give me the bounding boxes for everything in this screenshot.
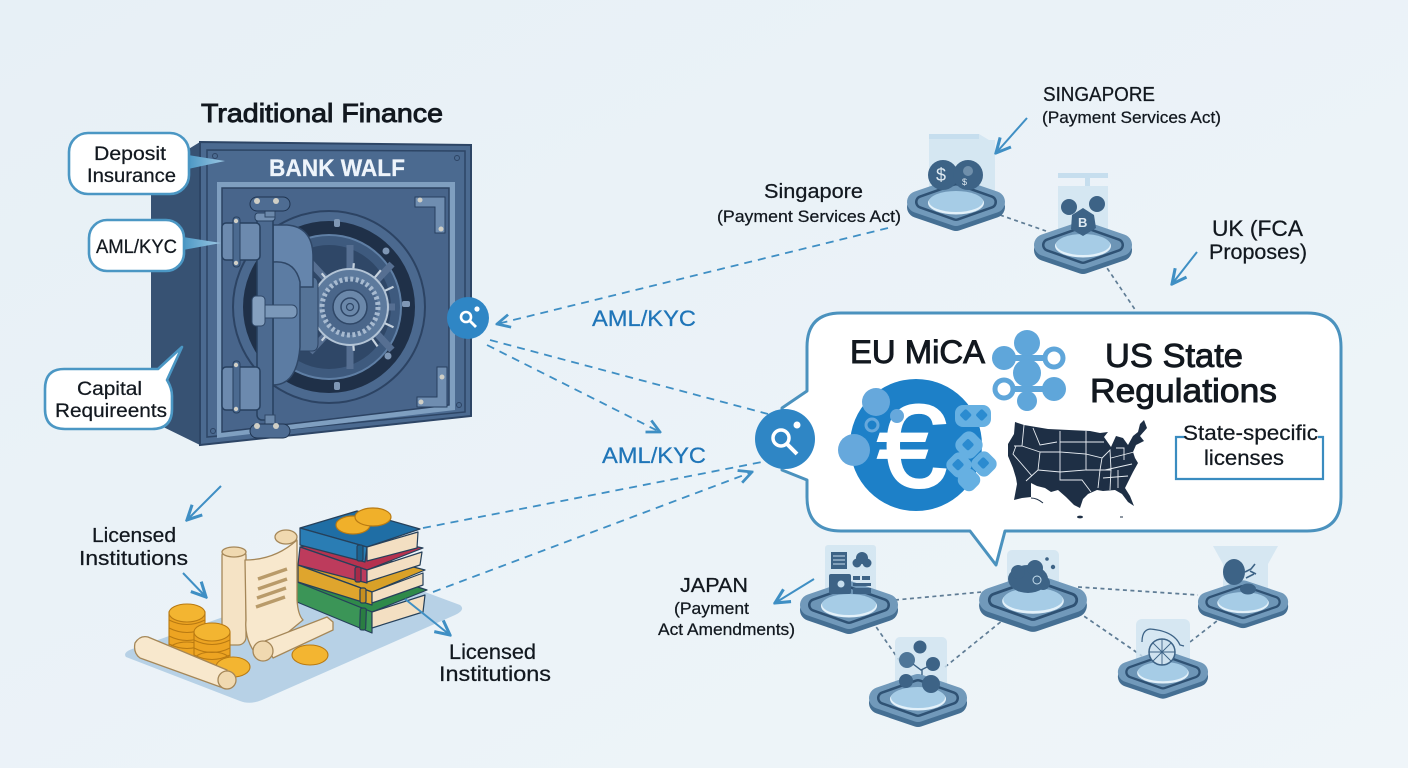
arrow: to left Licensed Institutions bbox=[187, 486, 221, 520]
node: top left coins: $ bbox=[936, 165, 946, 185]
label: Japan: (Payment bbox=[674, 599, 749, 618]
node: lower molecule bbox=[880, 637, 956, 716]
label: Licensed Institutions left: Institutions bbox=[79, 547, 188, 570]
label: Licensed Institutions right: Institutions bbox=[439, 663, 551, 686]
icon: small search badge bbox=[447, 297, 489, 339]
icon: large search badge bbox=[755, 409, 815, 469]
vault corner brackets bbox=[415, 197, 447, 407]
label: Singapore middle: (Payment Services Act) bbox=[717, 207, 901, 226]
label: SINGAPORE top bbox=[1042, 84, 1221, 127]
node: top right token: B bbox=[1078, 215, 1087, 230]
callout: AML/KYC: AML/KYC bbox=[96, 236, 177, 258]
label: Licensed Institutions right bbox=[439, 641, 551, 686]
node: Japan documents bbox=[811, 545, 887, 623]
callout: Deposit Insurance: Deposit bbox=[94, 143, 167, 165]
callout: Deposit Insurance bbox=[69, 133, 225, 194]
callout: Capital Requirements bbox=[45, 347, 182, 429]
node: top left coins bbox=[918, 134, 995, 220]
label: UK FCA bbox=[1209, 216, 1307, 264]
label: AML/KYC lower: AML/KYC bbox=[602, 443, 706, 468]
box: State-specific licenses: State-specific bbox=[1183, 421, 1318, 445]
label: Japan: Act Amendments) bbox=[658, 620, 795, 639]
icon: euro coin: € bbox=[877, 381, 947, 513]
label: UK FCA: Proposes) bbox=[1209, 241, 1307, 264]
dashed flow arrows bbox=[423, 228, 888, 592]
callout: AML/KYC bbox=[89, 220, 221, 271]
node: centre blob bbox=[991, 550, 1075, 620]
scroll and document bbox=[222, 530, 333, 661]
icon: euro coin bbox=[838, 379, 1000, 513]
arrow: Japan bbox=[775, 579, 814, 603]
arrow: UK bbox=[1172, 252, 1197, 284]
coins on books bbox=[336, 508, 391, 534]
bank vault bbox=[151, 142, 471, 445]
icon: network glyph bbox=[992, 330, 1066, 411]
label: Licensed Institutions left bbox=[79, 524, 188, 570]
long scroll bbox=[135, 637, 236, 689]
arrow: Singapore top bbox=[996, 118, 1027, 153]
platform shadow bbox=[125, 590, 462, 703]
network connections bbox=[872, 215, 1222, 670]
title: Traditional Finance: Traditional Finance bbox=[201, 98, 443, 128]
arrow: to coins bbox=[183, 573, 206, 597]
licensed institutions illustration bbox=[125, 508, 462, 703]
label: Singapore middle: Singapore bbox=[764, 181, 863, 203]
arrow: books to right label bbox=[405, 599, 450, 635]
label: Licensed Institutions left: Licensed bbox=[92, 524, 176, 547]
vault circular opening bbox=[233, 211, 425, 403]
label: Japan bbox=[658, 575, 795, 639]
box: State-specific licenses: licenses bbox=[1204, 446, 1284, 470]
label: SINGAPORE top: SINGAPORE bbox=[1043, 84, 1155, 106]
heading: EU MiCA: EU MiCA bbox=[850, 334, 986, 370]
node: top right token bbox=[1045, 173, 1121, 263]
panel: EU and US regulation callout bbox=[782, 313, 1341, 565]
book stack bbox=[297, 511, 427, 633]
vault name plate: BANK WALF bbox=[269, 155, 405, 182]
coin stacks bbox=[169, 604, 328, 677]
label: Licensed Institutions right: Licensed bbox=[449, 641, 536, 664]
callout: Capital Requirements: Capital bbox=[77, 378, 142, 400]
vault wheel bbox=[312, 263, 394, 351]
node: right bird bbox=[1208, 546, 1278, 618]
box: State-specific licenses bbox=[1176, 421, 1323, 479]
callout: Deposit Insurance: Insurance bbox=[87, 165, 176, 187]
label: UK FCA: UK (FCA bbox=[1212, 216, 1303, 241]
heading: US State Regulations: Regulations bbox=[1090, 372, 1277, 409]
callout: Capital Requirements: Requireents bbox=[55, 400, 167, 422]
icon: US states map bbox=[1008, 420, 1147, 518]
label: Singapore middle bbox=[717, 181, 901, 226]
node: wheel bbox=[1128, 619, 1198, 689]
label: SINGAPORE top: (Payment Services Act) bbox=[1042, 108, 1221, 127]
vault door bolts and plate bbox=[222, 197, 318, 438]
heading: US State Regulations bbox=[1090, 337, 1277, 409]
label: AML/KYC upper: AML/KYC bbox=[592, 306, 696, 331]
node: top left coins: $ bbox=[962, 177, 967, 187]
heading: US State Regulations: US State bbox=[1105, 337, 1243, 374]
label: Japan: JAPAN bbox=[680, 575, 748, 597]
